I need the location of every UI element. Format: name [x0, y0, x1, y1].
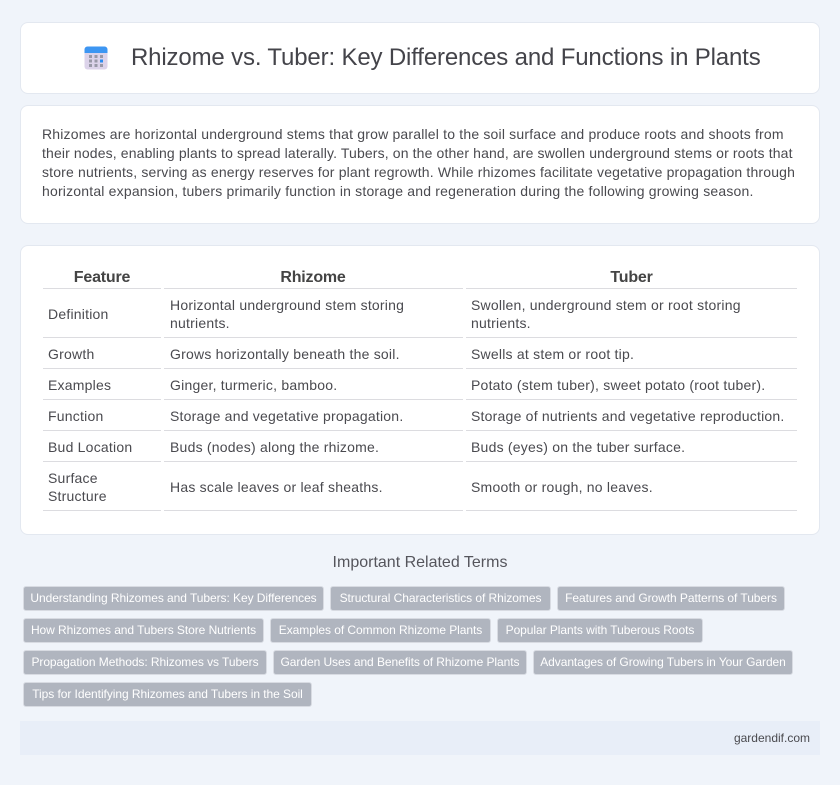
row: function: Function: [48, 408, 103, 424]
chip: [23, 618, 264, 643]
chip: [497, 618, 703, 643]
row: bud location: Buds (eyes) on the tuber surface.: [471, 439, 685, 455]
header card: [20, 22, 820, 94]
chip: Structural Characteristics of Rhizomes: [340, 591, 541, 605]
row: definition: Horizontal underground stem storing: [170, 297, 404, 313]
intro paragraph: store nutrients, serving as energy reserves for plant regrowth. While rhizomes facilitate vegetative propagation through: [42, 164, 795, 180]
row: function: [48, 408, 785, 424]
row: bud location: [48, 439, 685, 455]
chip: [330, 586, 551, 611]
table header: Tuber: [610, 269, 653, 286]
row: growth: Growth: [48, 346, 94, 362]
row: definition: Definition: [48, 306, 109, 322]
row: surface structure: Smooth or rough, no leaves.: [471, 479, 653, 495]
comparison table panel: [20, 245, 820, 535]
intro paragraph: Rhizomes are horizontal underground stems that grow parallel to the soil surface and produce roots and shoots from: [42, 126, 784, 142]
icon: calendar: [84, 46, 108, 70]
intro text card: [20, 105, 820, 224]
row: definition: nutrients.: [170, 315, 230, 331]
row: bud location: Bud Location: [48, 439, 132, 455]
row: function: Storage and vegetative propagation.: [170, 408, 403, 424]
row: surface structure: Structure: [48, 488, 107, 504]
row: definition: nutrients.: [471, 315, 531, 331]
intro paragraph: horizontal expansion, tubers primarily function in storage and regeneration during the following growing season.: [42, 183, 754, 199]
related terms chips: [23, 586, 793, 707]
chip: [23, 682, 312, 707]
chip: Tips for Identifying Rhizomes and Tubers in the Soil: [32, 687, 303, 701]
row: definition: [48, 297, 741, 331]
chip: Popular Plants with Tuberous Roots: [506, 623, 694, 637]
row: surface structure: Surface: [48, 470, 98, 486]
chip: Features and Growth Patterns of Tubers: [565, 591, 777, 605]
chip: Advantages of Growing Tubers in Your Garden: [540, 655, 786, 669]
row: examples: Examples: [48, 377, 111, 393]
row: surface structure: Has scale leaves or leaf sheaths.: [170, 479, 383, 495]
row: growth: [48, 346, 634, 362]
footer source text: gardendif.com: [734, 731, 810, 745]
row: examples: Potato (stem tuber), sweet potato (root tuber).: [471, 377, 765, 393]
intro paragraph: [42, 126, 795, 199]
chip: How Rhizomes and Tubers Store Nutrients: [31, 623, 256, 637]
row: definition: Swollen, underground stem or root storing: [471, 297, 741, 313]
row: function: Storage of nutrients and vegetative reproduction.: [471, 408, 785, 424]
row: growth: Swells at stem or root tip.: [471, 346, 634, 362]
table header: [74, 269, 653, 286]
related terms heading: Important Related Terms: [333, 554, 507, 571]
row: bud location: Buds (nodes) along the rhizome.: [170, 439, 379, 455]
chip: [23, 650, 267, 675]
row: examples: Ginger, turmeric, bamboo.: [170, 377, 337, 393]
footer bar: [20, 721, 820, 755]
chip: [270, 618, 491, 643]
chip: Examples of Common Rhizome Plants: [279, 623, 482, 637]
chip: [533, 650, 793, 675]
chip: [557, 586, 785, 611]
chip: Understanding Rhizomes and Tubers: Key Differences: [30, 591, 317, 605]
table header: Feature: [74, 269, 130, 286]
chip: [23, 586, 324, 611]
intro paragraph: their nodes, enabling plants to spread laterally. Tubers, on the other hand, are swollen underground stems or roots that: [42, 145, 793, 161]
row: surface structure: [48, 470, 653, 504]
table header: Rhizome: [280, 269, 346, 286]
row: growth: Grows horizontally beneath the soil.: [170, 346, 400, 362]
title: Rhizome vs. Tuber: Key Differences and Functions in Plants: [131, 44, 761, 71]
chip: [273, 650, 527, 675]
chip: Garden Uses and Benefits of Rhizome Plants: [281, 655, 519, 669]
chip: Propagation Methods: Rhizomes vs Tubers: [31, 655, 259, 669]
row: examples: [48, 377, 765, 393]
